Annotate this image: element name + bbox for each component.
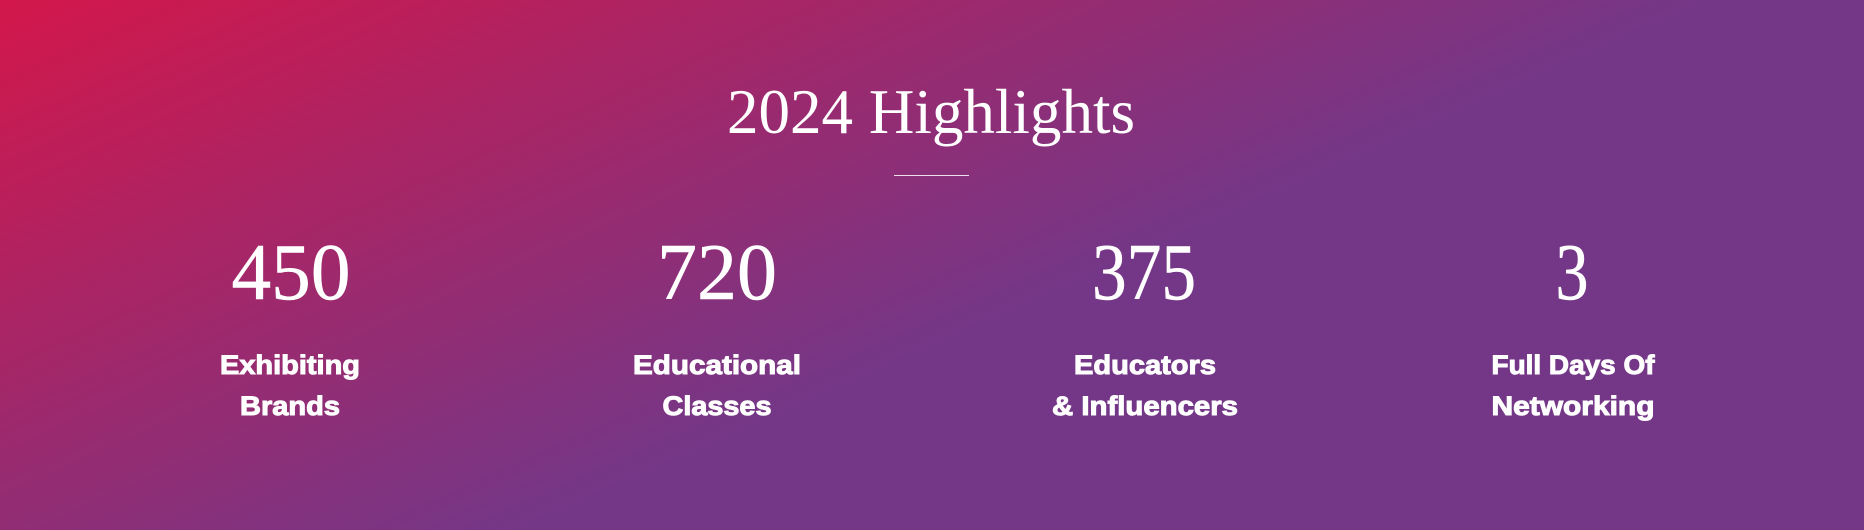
number: 375: 375 (1092, 229, 1196, 317)
label: educational classes (633, 350, 801, 421)
label: full days of networking (1492, 350, 1656, 421)
label: exhibiting brands (220, 350, 360, 421)
stat: full days of networking (1492, 229, 1656, 421)
label: full days of networking: Networking (1492, 391, 1654, 421)
stat: exhibiting brands (220, 229, 360, 421)
number: 3: 3 (1556, 229, 1588, 317)
number: 450: 450 (232, 229, 350, 317)
number: 720: 720 (657, 229, 777, 317)
label: educators and influencers: & Influencers (1052, 391, 1238, 421)
label: educators and influencers: Educators (1074, 350, 1216, 380)
title divider (894, 175, 969, 176)
label: educational classes: Educational (633, 350, 801, 380)
label: full days of networking: Full Days Of (1492, 350, 1656, 380)
stat: educators and influencers (1052, 229, 1238, 421)
label: exhibiting brands: Brands (240, 391, 340, 421)
label: educational classes: Classes (662, 391, 772, 421)
title: 2024 Highlights (727, 76, 1135, 147)
stat: educational classes (633, 229, 801, 421)
label: educators and influencers (1052, 350, 1238, 421)
label: exhibiting brands: Exhibiting (220, 350, 360, 380)
